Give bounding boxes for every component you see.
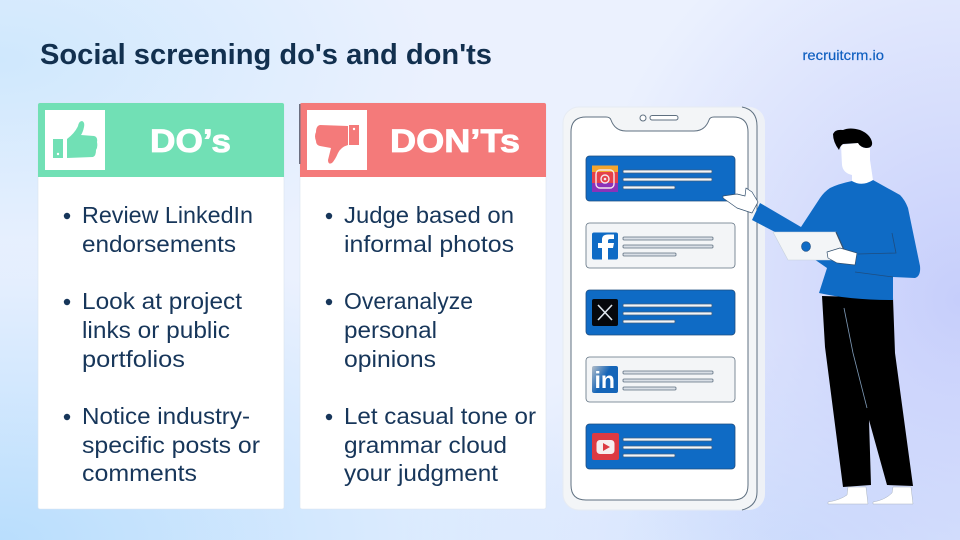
- icon: instagram: [592, 166, 618, 192]
- icon: youtube: [592, 433, 619, 460]
- trousers: [822, 296, 913, 487]
- don'ts list: Let casual tone or: [344, 403, 536, 429]
- phone screen with notch: [571, 117, 748, 500]
- card: linkedin: [586, 357, 735, 402]
- don'ts list: [326, 202, 536, 486]
- left shoe: [828, 487, 868, 504]
- text lines: [623, 304, 712, 323]
- do's list: specific posts or: [82, 432, 260, 458]
- card: instagram: [586, 156, 735, 201]
- text lines: [623, 438, 712, 457]
- text lines: [623, 170, 712, 189]
- person illustration: [723, 128, 920, 504]
- pointing hand: [723, 188, 758, 213]
- phone illustration: [563, 107, 765, 510]
- text lines: [623, 237, 713, 256]
- icon: linkedin: in: [594, 367, 615, 393]
- don'ts list: opinions: [344, 346, 436, 372]
- hair: [833, 128, 872, 150]
- panel: don'ts: [299, 103, 546, 509]
- text lines: [623, 371, 713, 390]
- do's header band: [38, 103, 284, 177]
- card: x: [586, 290, 735, 335]
- icon: thumbs up: [45, 110, 105, 170]
- hand on tablet: [827, 248, 857, 265]
- phone camera: [640, 115, 678, 121]
- do's list: comments: [82, 460, 197, 486]
- card: facebook: [586, 223, 735, 268]
- icon: thumbs down: [307, 110, 367, 170]
- do's list: Review LinkedIn: [82, 202, 253, 228]
- do's list: endorsements: [82, 231, 236, 257]
- tablet: [773, 232, 844, 260]
- don'ts heading: DON’Ts: [390, 123, 520, 159]
- don'ts list: Judge based on: [344, 202, 514, 228]
- do's list: links or public: [82, 317, 230, 343]
- icon: facebook: [592, 232, 618, 260]
- neck and face: [841, 143, 873, 184]
- do's list: Look at project: [82, 288, 242, 314]
- right shoe: [873, 487, 913, 504]
- icon: x: [592, 299, 618, 326]
- do's heading: DO’s: [150, 123, 231, 159]
- do's list: portfolios: [82, 346, 185, 372]
- don'ts list: personal: [344, 317, 437, 343]
- sweater: [752, 180, 920, 300]
- phone body: [563, 107, 765, 510]
- do's list: Notice industry-: [82, 403, 250, 429]
- don'ts list: Overanalyze: [344, 288, 473, 314]
- title: Social screening do's and don'ts: [40, 39, 492, 71]
- don'ts list: informal photos: [344, 231, 514, 257]
- don'ts list: your judgment: [344, 460, 498, 486]
- panel: do's: [38, 103, 284, 509]
- card: youtube: [586, 424, 735, 469]
- don'ts list: grammar cloud: [344, 432, 507, 458]
- don'ts header band: [300, 103, 546, 177]
- do's list: [64, 202, 260, 486]
- brand url: recruitcrm.io: [802, 47, 884, 63]
